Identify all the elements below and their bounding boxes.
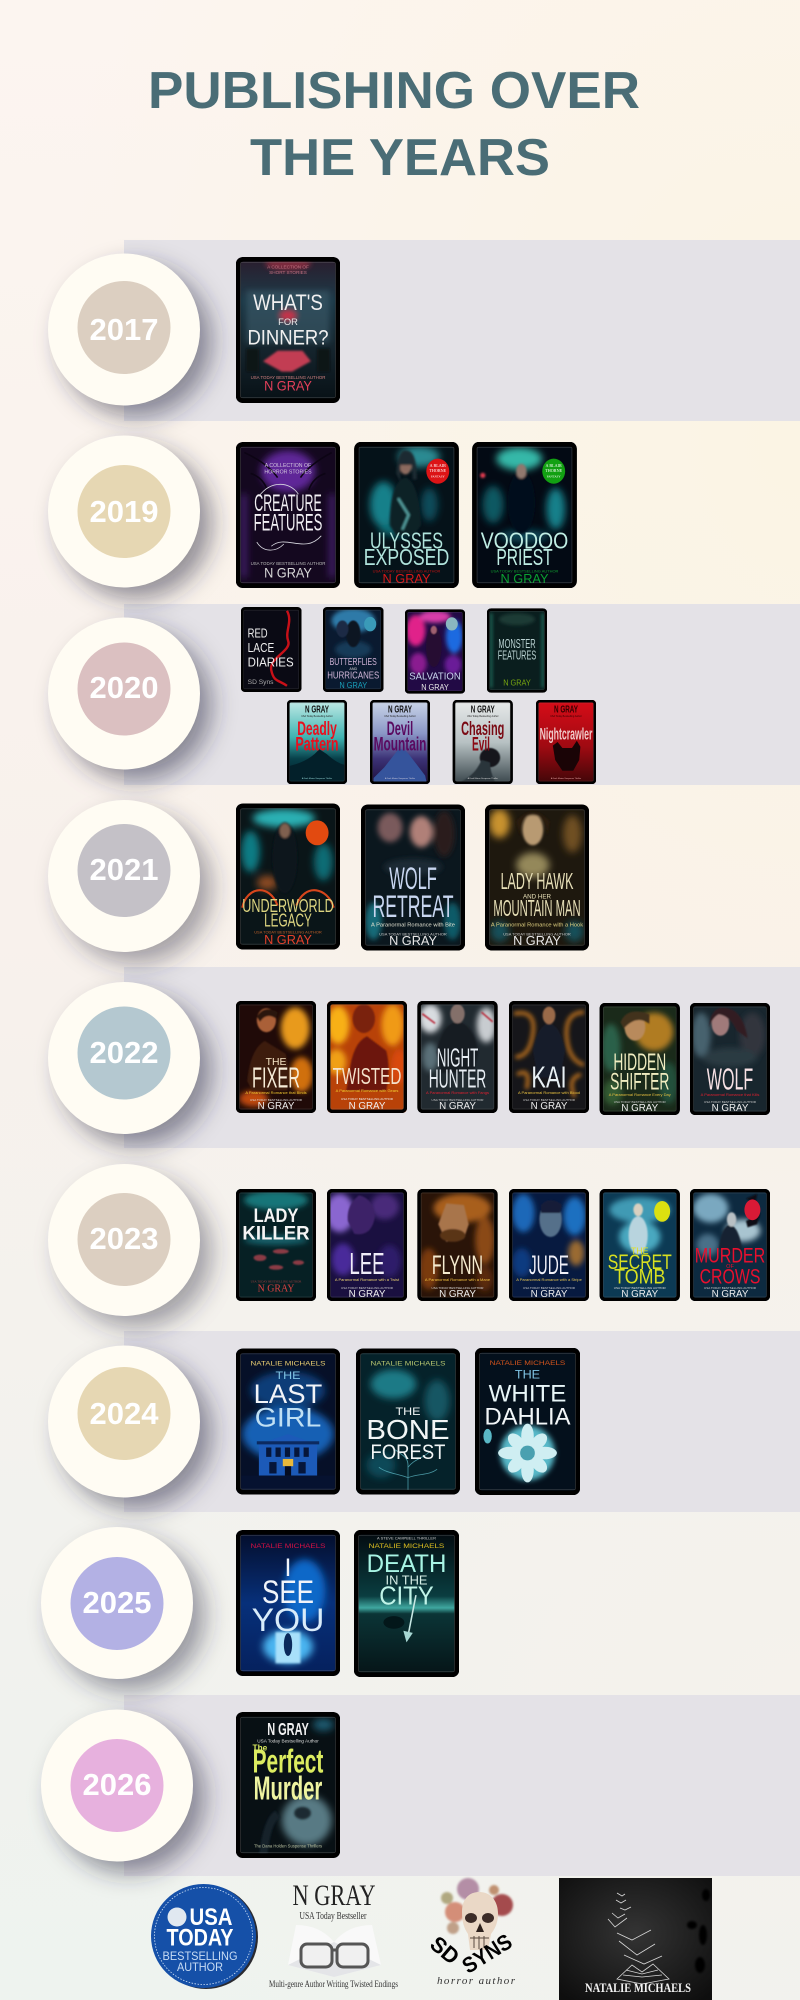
- year badge 2022: [48, 982, 212, 1146]
- book cover: Wolf Retreat: N GRAY: [389, 933, 437, 948]
- book cover: Twisted: N GRAY: [349, 1101, 385, 1112]
- book cover: Ulysses Exposed: THORNE: [429, 468, 447, 473]
- book cover: The Bone Forest: FOREST: [371, 1441, 446, 1464]
- book cover: Lee: A Paranormal Romance with a Twist: [335, 1277, 400, 1282]
- year badge 2021: 2021: [90, 852, 158, 887]
- year badge 2025: [41, 1527, 205, 1691]
- book cover: Jude: [509, 1189, 589, 1301]
- logo: N Gray USA Today Bestseller: N GRAY: [292, 1879, 376, 1912]
- year badge 2021: [48, 800, 212, 964]
- book cover: Flynn: A Paranormal Romance with a Mane: [425, 1277, 491, 1282]
- book cover: Creature Features: N GRAY: [264, 565, 312, 580]
- book cover: The Secret Tomb: TOMB: [614, 1265, 665, 1288]
- book cover: Creature Features: HORROR STORIES: [264, 469, 312, 475]
- book cover: The Perfect Murder: N GRAY: [267, 1719, 309, 1739]
- book cover: The Fixer: N GRAY: [258, 1101, 294, 1112]
- row: 2019: [48, 436, 577, 599]
- book cover: Wolf: A Paranormal Romance that Kills: [701, 1092, 759, 1097]
- book cover: I See You: SEE: [262, 1574, 314, 1610]
- book cover: Voodoo Priest: A BLAIR: [546, 463, 562, 468]
- book cover: Butterflies and Hurricanes: AND: [349, 667, 357, 671]
- book cover: Deadly Pattern: [287, 700, 347, 784]
- book cover: Creature Features: USA TODAY BESTSELLING AUTHOR: [251, 561, 325, 566]
- book cover: Death in the City: [354, 1530, 459, 1677]
- book cover: The White Dahlia: DAHLIA: [484, 1404, 571, 1431]
- book cover: I See You: [236, 1530, 340, 1676]
- book cover: Flynn: N GRAY: [439, 1289, 476, 1300]
- book cover: Deadly Pattern: N GRAY: [305, 705, 329, 716]
- book cover: Wolf: USA TODAY BESTSELLING AUTHOR: [704, 1100, 757, 1104]
- book cover: Monster Features: N GRAY: [503, 678, 532, 687]
- book cover: Voodoo Priest: FANTASY: [547, 474, 561, 478]
- book cover: Death in the City: DEATH: [367, 1550, 446, 1578]
- book cover: The Last Girl: [236, 1348, 340, 1494]
- book cover: The Last Girl: GIRL: [255, 1403, 321, 1433]
- book cover: Lee: N GRAY: [349, 1289, 385, 1300]
- year badge 2020: [48, 618, 212, 781]
- book cover: The Bone Forest: [356, 1348, 460, 1494]
- book cover: Chasing Evil: [452, 700, 513, 784]
- year badge 2019: [48, 436, 212, 599]
- book cover: Hidden Shifter: USA TODAY BESTSELLING AUTHOR: [614, 1100, 667, 1104]
- book cover: Ulysses Exposed: USA TODAY BESTSELLING AUTHOR: [373, 568, 441, 573]
- title: THE YEARS: [250, 129, 550, 187]
- book cover: The Secret Tomb: USA TODAY BESTSELLING AUTHOR: [614, 1286, 667, 1290]
- logo: SD Syns horror author: SYNS: [458, 1929, 517, 1979]
- book cover: The Bone Forest: NATALIE MICHAELS: [371, 1360, 446, 1367]
- book cover: Deadly Pattern: A Dark Maine Suspense Thriller: [302, 777, 332, 780]
- logo: Natalie Michaels: NATALIE MICHAELS: [585, 1980, 691, 1995]
- row: 2021: [48, 800, 589, 964]
- book cover: Ulysses Exposed: N GRAY: [383, 571, 431, 586]
- book cover: Underworld Legacy: N GRAY: [264, 932, 312, 947]
- book cover: What's for Dinner?: N GRAY: [264, 378, 312, 393]
- row: 2026: [41, 1710, 340, 1873]
- row: 2024: [48, 1346, 580, 1509]
- book cover: Devil Mountain: [370, 700, 430, 784]
- row: 2025: [41, 1527, 459, 1691]
- book cover: Salvation: [405, 609, 465, 694]
- book cover: Red Lace Diaries: RED: [248, 626, 268, 640]
- book cover: What's for Dinner?: USA TODAY BESTSELLING AUTHOR: [251, 375, 325, 380]
- book cover: What's for Dinner?: DINNER?: [247, 327, 329, 350]
- book cover: Devil Mountain: A Dark Maine Suspense Thriller: [385, 777, 415, 780]
- book cover: Lady Hawk and Her Mountain Man: AND HER: [523, 893, 552, 900]
- book cover: Lady Hawk and Her Mountain Man: N GRAY: [513, 933, 561, 948]
- book cover: Wolf: [690, 1003, 770, 1115]
- book cover: The White Dahlia: NATALIE MICHAELS: [490, 1360, 566, 1367]
- title: PUBLISHING OVER: [148, 62, 640, 120]
- book cover: Salvation: SALVATION: [409, 672, 461, 683]
- book cover: Devil Mountain: USA Today Bestselling Author: [384, 715, 416, 718]
- timeline bands: [124, 240, 800, 1876]
- book cover: Kai: KAI: [531, 1060, 567, 1094]
- book cover: Death in the City: A STEVE CAMPBELL THRILLER: [377, 1535, 436, 1540]
- book cover: Kai: N GRAY: [531, 1101, 567, 1112]
- book cover: Lady Killer: N GRAY: [258, 1283, 295, 1294]
- year badge 2025: 2025: [83, 1585, 151, 1620]
- book cover: Ulysses Exposed: FANTASY: [431, 474, 445, 478]
- book cover: Voodoo Priest: [472, 442, 577, 588]
- book cover: The Last Girl: LAST: [254, 1379, 322, 1409]
- book cover: Underworld Legacy: USA TODAY BESTSELLING AUTHOR: [254, 930, 322, 935]
- book cover: Lee: [327, 1189, 407, 1301]
- book cover: The Bone Forest: THE: [396, 1406, 421, 1418]
- book cover: Lady Killer: KILLER: [242, 1223, 310, 1244]
- book cover: Chasing Evil: A Dark Maine Suspense Thriller: [468, 777, 498, 780]
- book cover: The Last Girl: NATALIE MICHAELS: [251, 1360, 326, 1367]
- year badge 2024: 2024: [90, 1396, 159, 1431]
- year badge 2023: [48, 1164, 212, 1328]
- logo: USA Today Bestselling Author: USA: [190, 1904, 232, 1931]
- book cover: Red Lace Diaries: SD Syns: [248, 679, 274, 686]
- book cover: Death in the City: IN THE: [385, 1574, 427, 1588]
- book cover: The White Dahlia: THE: [515, 1369, 540, 1381]
- row: 2017: [48, 254, 340, 417]
- book cover: Jude: A Paranormal Romance with a Stripe: [516, 1277, 583, 1282]
- year badge 2020: 2020: [90, 670, 158, 705]
- book cover: Devil Mountain: N GRAY: [388, 705, 412, 716]
- year badge 2022: 2022: [90, 1035, 158, 1070]
- book cover: Voodoo Priest: N GRAY: [501, 571, 549, 586]
- logo: Natalie Michaels: [559, 1878, 712, 2000]
- book cover: Death in the City: CITY: [379, 1581, 434, 1611]
- book cover: Ulysses Exposed: A BLAIR: [430, 463, 446, 468]
- book cover: What's for Dinner?: A COLLECTION OF: [267, 265, 309, 270]
- book cover: I See You: NATALIE MICHAELS: [251, 1543, 326, 1550]
- book cover: Twisted: [327, 1001, 407, 1113]
- row: 2022: [48, 982, 770, 1146]
- book cover: Wolf Retreat: USA TODAY BESTSELLING AUTHOR: [379, 932, 447, 937]
- book cover: Creature Features: A COLLECTION OF: [265, 463, 311, 469]
- book cover: Night Hunter: A Paranormal Romance with Fangs: [426, 1090, 489, 1095]
- book cover: Creature Features: [236, 442, 340, 588]
- book cover: What's for Dinner?: FOR: [278, 317, 298, 327]
- book cover: Lady Killer: LADY: [254, 1206, 299, 1227]
- book cover: Flynn: USA TODAY BESTSELLING AUTHOR: [432, 1286, 484, 1290]
- book cover: I See You: YOU: [252, 1602, 324, 1638]
- book cover: Hidden Shifter: A Paranormal Romance Every Day: [609, 1092, 671, 1097]
- book cover: Chasing Evil: Evil: [472, 734, 490, 755]
- book cover: Wolf: N GRAY: [712, 1103, 748, 1114]
- year badge 2017: 2017: [90, 312, 158, 347]
- logo: USA Today Bestselling Author: TODAY: [166, 1924, 234, 1952]
- book cover: What's for Dinner?: [236, 257, 340, 403]
- book cover: The Perfect Murder: [236, 1712, 340, 1858]
- book cover: The White Dahlia: [475, 1348, 580, 1495]
- logo: SD Syns horror author: SD: [425, 1931, 464, 1969]
- book cover: Flynn: [417, 1189, 498, 1301]
- book cover: Voodoo Priest: USA TODAY BESTSELLING AUTHOR: [491, 568, 559, 573]
- book cover: Wolf Retreat: [361, 804, 465, 950]
- title: [148, 62, 640, 187]
- book cover: Voodoo Priest: THORNE: [545, 468, 563, 473]
- book cover: Chasing Evil: USA Today Bestselling Author: [467, 715, 499, 718]
- logo: N Gray USA Today Bestseller: Multi-genre Author Writing Twisted Endings: [269, 1979, 398, 1989]
- book cover: Murder of Crows: [690, 1189, 770, 1301]
- book cover: Underworld Legacy: LEGACY: [264, 909, 312, 930]
- book cover: Murder of Crows: OF: [726, 1264, 734, 1270]
- book cover: Twisted: USA TODAY BESTSELLING AUTHOR: [341, 1097, 394, 1101]
- book cover: Underworld Legacy: [236, 804, 340, 950]
- book cover: Salvation: N GRAY: [421, 683, 450, 692]
- year badge 2024: [48, 1346, 212, 1509]
- book cover: The Fixer: [236, 1001, 316, 1113]
- book cover: Murder of Crows: USA TODAY BESTSELLING AUTHOR: [704, 1286, 757, 1290]
- book cover: The Secret Tomb: N GRAY: [621, 1289, 658, 1300]
- book cover: Nightcrawler: A Dark Maine Suspense Thriller: [551, 777, 581, 780]
- book cover: Hidden Shifter: [600, 1003, 680, 1115]
- book cover: Jude: USA TODAY BESTSELLING AUTHOR: [523, 1286, 576, 1290]
- book cover: Nightcrawler: USA Today Bestselling Author: [550, 715, 582, 718]
- year badge 2019: 2019: [90, 494, 158, 529]
- book cover: Lady Killer: [236, 1189, 316, 1301]
- book cover: Lady Killer: USA TODAY BESTSELLING AUTHOR: [251, 1280, 302, 1284]
- book cover: Night Hunter: USA TODAY BESTSELLING AUTHOR: [432, 1098, 484, 1102]
- book cover: What's for Dinner?: SHORT STORIES: [269, 270, 307, 275]
- logo: N Gray USA Today Bestseller: [269, 1879, 398, 1989]
- book cover: Ulysses Exposed: [354, 442, 459, 588]
- book cover: Lady Hawk and Her Mountain Man: [485, 804, 589, 950]
- book cover: Nightcrawler: [536, 700, 596, 784]
- book cover: Death in the City: NATALIE MICHAELS: [369, 1543, 445, 1550]
- book cover: The Secret Tomb: THE: [631, 1246, 649, 1256]
- book cover: Lady Hawk and Her Mountain Man: USA TODAY BESTSELLING AUTHOR: [503, 932, 571, 937]
- book cover: Twisted: A Paranormal Romance with Gears: [336, 1088, 398, 1093]
- logo: USA Today Bestselling Author: BESTSELLING: [162, 1949, 238, 1963]
- logo: USA Today Bestselling Author: AUTHOR: [177, 1960, 223, 1974]
- book cover: Jude: N GRAY: [531, 1289, 567, 1300]
- year badge 2026: 2026: [83, 1767, 151, 1802]
- year badge 2026: [41, 1710, 205, 1873]
- book cover: The Fixer: USA TODAY BESTSELLING AUTHOR: [250, 1098, 303, 1102]
- book cover: The Perfect Murder: The: [253, 1743, 268, 1753]
- book cover: Kai: USA TODAY BESTSELLING AUTHOR: [523, 1098, 576, 1102]
- book cover: Red Lace Diaries: DIARIES: [248, 655, 294, 669]
- book cover: Murder of Crows: N GRAY: [712, 1289, 748, 1300]
- logo: N Gray USA Today Bestseller: USA Today Bestseller: [300, 1911, 367, 1922]
- book cover: Lee: LEE: [349, 1247, 385, 1281]
- book cover: Red Lace Diaries: [241, 607, 302, 692]
- book cover: The Fixer: A Paranormal Romance that Binds: [245, 1090, 307, 1095]
- row: 2020: [48, 607, 596, 784]
- book cover: Chasing Evil: N GRAY: [471, 705, 495, 716]
- book cover: The Last Girl: THE: [276, 1370, 301, 1382]
- logo: USA Today Bestselling Author: [151, 1884, 258, 1989]
- book cover: Night Hunter: N GRAY: [439, 1101, 476, 1112]
- footer logos: [151, 1878, 712, 2000]
- book cover: The Perfect Murder: The Dana Holden Suspense Thrillers: [254, 1843, 322, 1848]
- book cover: Nightcrawler: N GRAY: [554, 705, 578, 716]
- book cover: Red Lace Diaries: LACE: [248, 641, 274, 655]
- book cover: Lee: USA TODAY BESTSELLING AUTHOR: [341, 1286, 394, 1290]
- book cover: The Fixer: THE: [266, 1057, 286, 1068]
- book cover: Butterflies and Hurricanes: [323, 607, 384, 692]
- book cover: Deadly Pattern: USA Today Bestselling Author: [301, 715, 333, 718]
- logo: SD Syns horror author: [425, 1878, 517, 1987]
- year badge 2023: 2023: [90, 1221, 158, 1256]
- book cover: Butterflies and Hurricanes: N GRAY: [339, 681, 368, 690]
- book cover: Night Hunter: [417, 1001, 498, 1113]
- book cover: Kai: [509, 1001, 589, 1113]
- book cover: Wolf Retreat: A Paranormal Romance with Bite: [371, 922, 455, 928]
- book cover: The Bone Forest: BONE: [366, 1414, 450, 1445]
- book cover: The White Dahlia: WHITE: [489, 1381, 566, 1408]
- book cover: The Perfect Murder: USA Today Bestselling Author: [257, 1738, 319, 1743]
- book cover: I See You: I: [285, 1554, 291, 1582]
- book cover: Hidden Shifter: N GRAY: [621, 1103, 658, 1114]
- book cover: Kai: A Paranormal Romance with Blood: [518, 1090, 580, 1095]
- book cover: The Secret Tomb: [600, 1189, 680, 1301]
- logo: SD Syns horror author: horror author: [437, 1975, 516, 1987]
- year badge 2017: [48, 254, 212, 417]
- book cover: Lady Hawk and Her Mountain Man: A Paranormal Romance with a Hook: [491, 922, 583, 928]
- book cover: What's for Dinner?: WHAT'S: [253, 290, 323, 315]
- book cover: Monster Features: [487, 608, 547, 693]
- row: 2023: [48, 1164, 770, 1328]
